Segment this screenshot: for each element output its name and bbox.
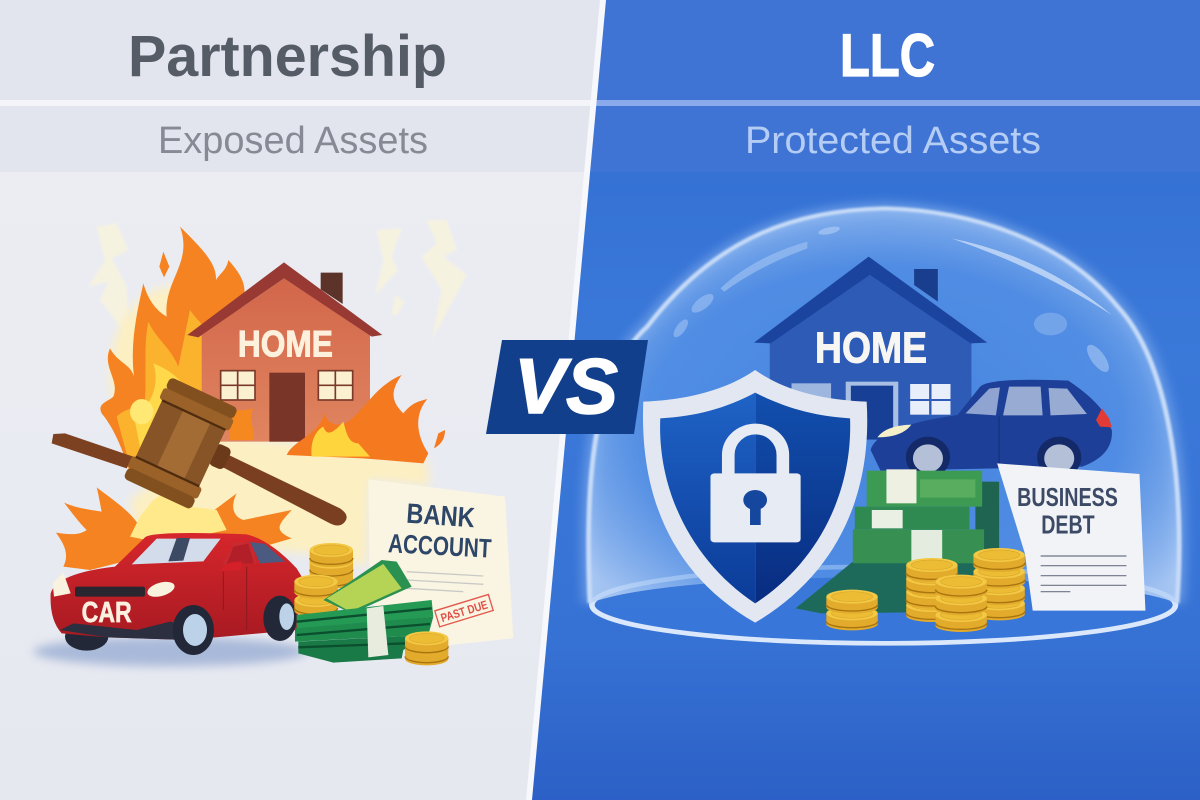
icon: coin stacks [294, 543, 353, 617]
icon: protected house [754, 257, 987, 440]
document: business debt [997, 463, 1145, 611]
icon: gavel [52, 376, 347, 525]
car shadow [33, 637, 307, 666]
badge: VS [486, 340, 648, 434]
flame glow [110, 287, 430, 567]
icon: protected house: HOME [815, 324, 927, 372]
dome outer glow [588, 208, 1179, 603]
base platform [592, 567, 1175, 643]
document: business debt: BUSINESS [1017, 483, 1118, 512]
diagonal divider [526, 0, 606, 800]
illustration: exposed assets [33, 220, 513, 666]
title: LLC: LLC [840, 22, 935, 89]
flames behind house [100, 227, 245, 473]
subtitle: Protected Assets: Protected Assets [745, 120, 1041, 162]
illustration: protected assets [588, 208, 1179, 643]
subtitle: Exposed Assets: Exposed Assets [158, 120, 428, 162]
icon: lightning bolts [88, 220, 467, 340]
icon: coin stack front [405, 631, 448, 665]
icon: burning house [187, 262, 382, 442]
icon: shield with lock [643, 370, 867, 623]
title: Partnership: Partnership [128, 24, 447, 89]
icon: protected car [871, 380, 1112, 478]
flames behind car [56, 487, 292, 570]
flames in front of house [227, 375, 445, 463]
badge: VS: VS [514, 342, 618, 430]
icon: gold coin stacks [826, 548, 1025, 632]
document: bank account [368, 479, 513, 650]
icon: cash stack [295, 560, 433, 663]
panel: LLC background [530, 0, 1200, 800]
icon: red car [51, 533, 302, 655]
document: bank account: BANK [405, 498, 476, 533]
document: business debt: DEBT [1041, 511, 1095, 540]
stamp: past due: PAST DUE [439, 598, 489, 625]
icon: red car: CAR [82, 597, 132, 629]
document: bank account: ACCOUNT [387, 528, 492, 564]
glass dome [588, 208, 1179, 603]
icon: protected cash stack [795, 469, 999, 613]
icon: burning house: HOME [238, 323, 333, 365]
panel: partnership background [0, 0, 610, 800]
icon: padlock [710, 429, 801, 542]
